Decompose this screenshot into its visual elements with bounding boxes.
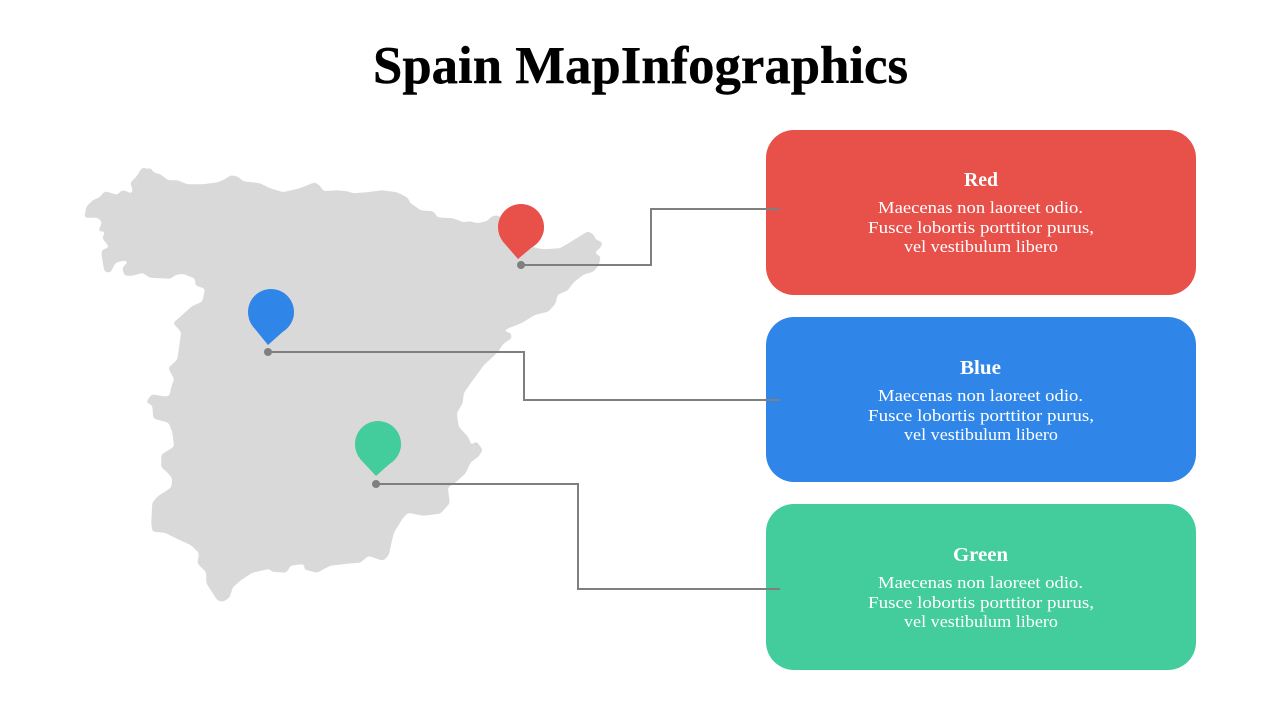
connector: red <box>517 209 780 269</box>
icon: blue pin <box>248 289 294 345</box>
panel: red: Red <box>964 169 998 191</box>
panel: blue: vel vestibulum libero <box>904 425 1058 444</box>
connector: blue <box>264 348 780 400</box>
panel: red: Maecenas non laoreet odio. <box>878 198 1083 217</box>
title: Spain MapInfographics <box>373 37 908 95</box>
panel: blue: Blue <box>960 357 1001 379</box>
panel: green: Green <box>953 544 1008 566</box>
panel: blue <box>766 317 1196 482</box>
icon: green pin <box>355 421 401 476</box>
panel: blue: Fusce lobortis porttitor purus, <box>868 406 1094 425</box>
panel: red: Fusce lobortis porttitor purus, <box>868 218 1094 237</box>
panel: blue: Maecenas non laoreet odio. <box>878 386 1083 405</box>
connector: green <box>372 480 780 589</box>
icon: red pin <box>498 204 544 259</box>
panel: green: Fusce lobortis porttitor purus, <box>868 593 1094 612</box>
panel: green <box>766 504 1196 670</box>
map of Spain <box>85 168 602 601</box>
panel: red <box>766 130 1196 295</box>
panel: red: vel vestibulum libero <box>904 237 1058 256</box>
panel: green: vel vestibulum libero <box>904 612 1058 631</box>
panel: green: Maecenas non laoreet odio. <box>878 573 1083 592</box>
